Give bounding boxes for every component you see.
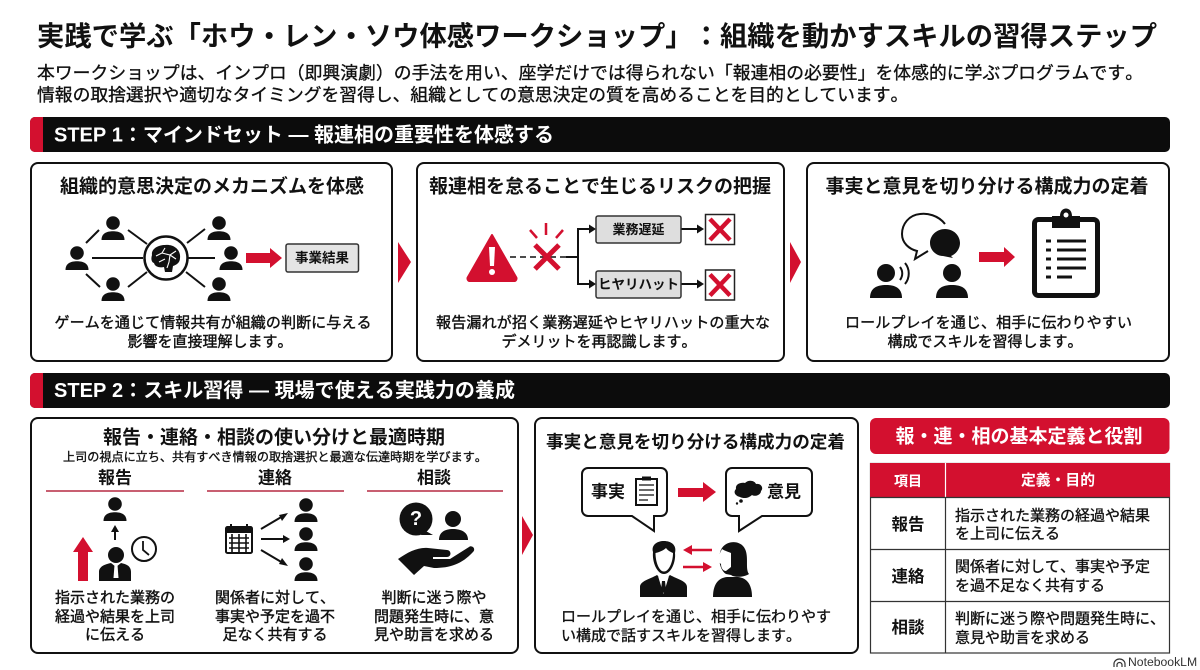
panel description: [436, 314, 770, 350]
row: consult: 相談: [892, 618, 925, 637]
column: inform: [207, 468, 344, 644]
panel heading: 報告・連絡・相談の使い分けと最適時期: [103, 426, 445, 448]
intro text: 情報の取捨選択や適切なタイミングを習得し、組織としての意思決定の質を高めることを目的としています。: [37, 85, 908, 105]
table header: 定義・目的: [1021, 471, 1095, 489]
intro text: 本ワークショップは、インプロ（即興演劇）の手法を用い、座学だけでは得られない「報連相の必要性」を体感的に学ぶプログラムです。: [37, 63, 1143, 83]
business result box: [286, 244, 358, 272]
panel heading: 事実と意見を切り分ける構成力の定着: [546, 432, 845, 452]
step 1 banner: STEP 1：マインドセット — 報連相の重要性を体感する: [54, 122, 554, 146]
panel description: 影響を直接理解します。: [127, 334, 293, 350]
intro text: [37, 63, 1143, 105]
column description: 足なく共有する: [222, 626, 328, 644]
box: near miss: ヒヤリハット: [598, 277, 679, 292]
row: inform: [892, 558, 1150, 594]
box: near miss: [596, 271, 681, 298]
red arrow: [979, 247, 1015, 267]
red table heading: 報・連・相の基本定義と役割: [895, 426, 1143, 448]
role play icon: [870, 214, 968, 298]
icon: report upward: [73, 497, 156, 581]
speech bubble: opinion: [726, 468, 812, 531]
row: consult: 判断に迷う際や問題発生時に、: [955, 610, 1165, 628]
chevron arrow: [522, 516, 533, 555]
panel description: 構成でスキルを習得します。: [887, 334, 1083, 350]
panel description: [561, 608, 831, 644]
column description: [215, 590, 335, 644]
row: report: 指示された業務の経過や結果: [955, 508, 1150, 524]
panel heading: 事実と意見を切り分ける構成力の定着: [826, 174, 1148, 198]
panel: organizational decision mechanism: [31, 163, 392, 361]
chevron arrow: [790, 242, 801, 283]
column description: [374, 590, 494, 644]
column description: [55, 590, 175, 644]
panel description: デメリットを再認識します。: [501, 332, 697, 350]
network diagram icon: [66, 216, 242, 301]
icon: red x top: [706, 214, 734, 244]
column: inform: 連絡: [258, 468, 292, 488]
panel description: ロールプレイを通じ、相手に伝わりやす: [561, 608, 831, 626]
box: work delay: 業務遅延: [612, 222, 665, 237]
icon: red x bottom: [706, 270, 734, 300]
title: 実践で学ぶ「ホウ・レン・ソウ体感ワークショップ」：組織を動かすスキルの習得ステップ: [37, 20, 1157, 52]
panel: separating facts and opinions: [807, 163, 1169, 361]
box: work delay: [596, 216, 681, 243]
clipboard icon: [1034, 208, 1098, 296]
panel description: ロールプレイを通じ、相手に伝わりやすい: [845, 314, 1132, 332]
business result box: 事業結果: [295, 250, 349, 266]
red table heading: [870, 418, 1170, 454]
row: report: 報告: [892, 515, 924, 534]
icon: consult hand: [398, 502, 474, 575]
panel description: ゲームを通じて情報共有が組織の判断に与える: [54, 314, 372, 332]
warning triangle icon: [468, 235, 517, 281]
red arrow: [246, 248, 282, 268]
row: inform: を過不足なく共有する: [955, 578, 1105, 594]
panel: when to report, inform, consult: [31, 418, 518, 653]
column: report: 報告: [98, 468, 132, 488]
panel description: [845, 314, 1132, 350]
speech bubble: fact: 事実: [591, 482, 625, 502]
column description: 関係者に対して、: [215, 590, 335, 606]
branch arrows: [566, 224, 704, 288]
row: consult: [892, 610, 1165, 646]
column description: 見や助言を求める: [374, 626, 494, 644]
man and woman talking icon: [640, 541, 752, 597]
icon: inform many: [226, 498, 318, 581]
table header: 項目: [894, 473, 922, 489]
icon: consult hand: ?: [410, 508, 422, 530]
step 2 banner: STEP 2：スキル習得 — 現場で使える実践力の養成: [54, 378, 515, 402]
row: report: [892, 508, 1150, 542]
step 2 banner: [30, 373, 1170, 408]
row: report: を上司に伝える: [955, 526, 1060, 542]
panel heading: 報連相を怠ることで生じるリスクの把握: [429, 176, 771, 198]
column description: に伝える: [85, 626, 145, 644]
table header: [870, 463, 1170, 497]
column description: 経過や結果を上司: [55, 608, 175, 626]
column: consult: 相談: [417, 468, 451, 488]
row: inform: 連絡: [892, 567, 925, 586]
speech bubble: opinion: 意見: [767, 482, 801, 502]
panel description: [54, 314, 372, 350]
NotebookLM watermark: NotebookLM: [1128, 655, 1197, 669]
broken link mark: [510, 223, 567, 269]
step 1 banner: [30, 117, 1170, 152]
column description: 事実や予定を過不: [215, 608, 335, 626]
panel: risk of neglecting reporting: [417, 163, 784, 361]
row: consult: 意見や助言を求める: [955, 630, 1090, 646]
panel description: 報告漏れが招く業務遅延やヒヤリハットの重大な: [436, 314, 770, 332]
column description: 指示された業務の: [55, 590, 175, 606]
column description: 判断に迷う際や: [381, 590, 487, 606]
red arrow: [678, 482, 716, 502]
definition table: [870, 463, 1170, 653]
panel description: い構成で話すスキルを習得します。: [561, 628, 801, 644]
column description: 問題発生時に、意: [374, 608, 494, 626]
panel: structuring skill: [535, 418, 858, 653]
chevron arrow: [398, 242, 411, 283]
panel heading: 組織的意思決定のメカニズムを体感: [60, 174, 364, 198]
row: inform: 関係者に対して、事実や予定: [955, 558, 1150, 576]
panel subheading: 上司の視点に立ち、共有すべき情報の取捨選択と最適な伝達時期を学びます。: [63, 449, 487, 464]
column: consult: [367, 468, 503, 644]
column: report: [46, 468, 184, 644]
speech bubble: fact: [582, 468, 667, 531]
